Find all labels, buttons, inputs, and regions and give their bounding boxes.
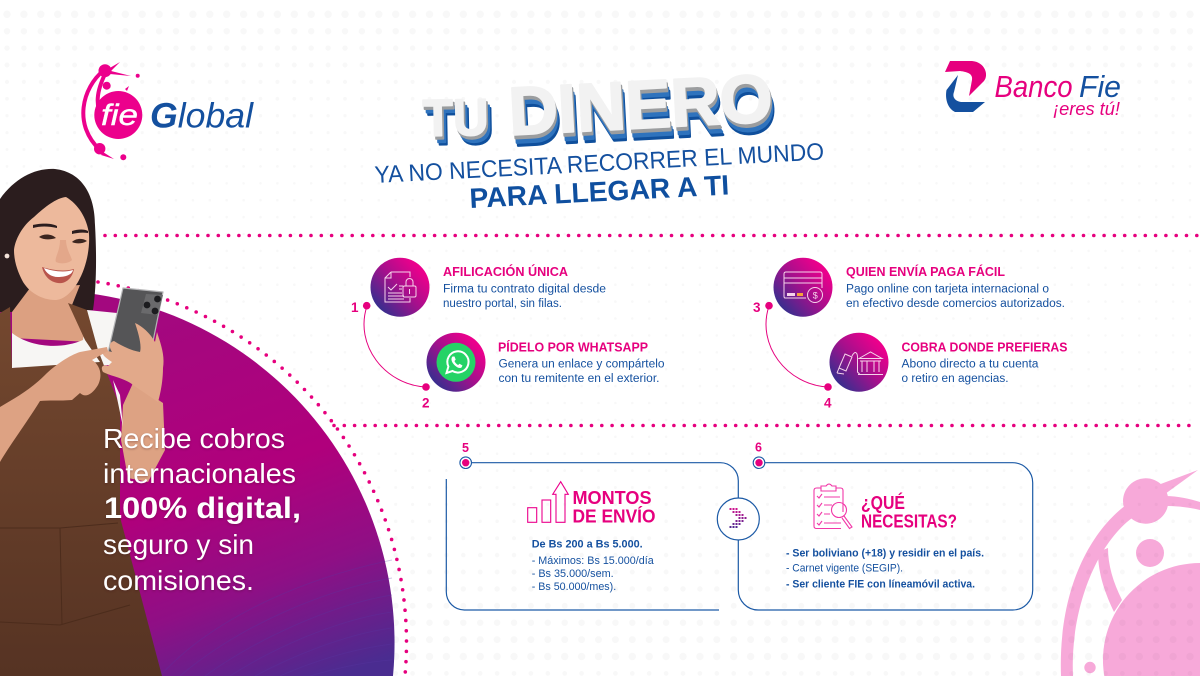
subtitle line 2: PARA LLEGAR A TI: [469, 169, 730, 214]
title: TU DINERO: TU: [426, 95, 493, 154]
text: whatsapp: con tu remitente en el exterior.: [498, 373, 660, 385]
connector 3 to 4: 4: [824, 396, 832, 410]
logo: Banco Fie: Banco: [994, 69, 1072, 104]
text: afiliacion unica: Firma tu contrato digital desde: [443, 284, 606, 296]
heading: montos: MONTOS: [572, 488, 652, 508]
magenta circle panel: [0, 290, 395, 676]
text: quien envia: en efectivo desde comercios autorizados.: [846, 298, 1065, 310]
text: whatsapp: [498, 340, 664, 385]
heading: que necesitas: ¿QUÉ: [861, 492, 905, 513]
logo: Banco Fie: ¡eres tú!: [1053, 99, 1120, 119]
text: afiliacion unica: [443, 264, 606, 310]
icon: clipboard: [814, 484, 852, 528]
icon: contract and lock: [370, 258, 430, 317]
limits text: - Máximos: Bs 15.000/día: [532, 555, 655, 567]
panel: que necesitas: [738, 440, 1033, 610]
title: TU DINERO: DINERO: [508, 64, 776, 153]
subtitle line 1: YA NO NECESITA RECORRER EL MUNDO: [374, 138, 825, 189]
panel text: recibe cobros: comisiones.: [103, 565, 254, 596]
heading: montos: DE ENVÍO: [572, 506, 656, 527]
icon: whatsapp: [426, 333, 486, 392]
logo: Fie Global: [83, 62, 254, 160]
limits text: De Bs 200 a Bs 5.000.: [532, 538, 643, 550]
logo: Banco Fie: Fie: [1079, 69, 1121, 104]
logo: Banco Fie: [945, 61, 1121, 119]
heading: que necesitas: [861, 492, 957, 531]
text: whatsapp: PÍDELO POR WHATSAPP: [498, 340, 648, 354]
limits text: - Bs 35.000/sem.: [532, 568, 614, 580]
title: TU DINERO: DINERO: [507, 60, 774, 150]
panel text: recibe cobros: [103, 423, 301, 596]
limits text: [532, 538, 655, 593]
title: TU DINERO: DINERO: [510, 71, 778, 161]
title: TU DINERO: [422, 60, 778, 161]
icon: rising bars: [528, 482, 568, 522]
arrow badge: [717, 498, 759, 540]
title: TU DINERO: TU: [422, 89, 489, 148]
connector 1 to 2: 2: [422, 396, 430, 410]
text: cobra donde: o retiro en agencias.: [902, 373, 1008, 385]
text: quien envia: QUIEN ENVÍA PAGA FÁCIL: [846, 264, 1005, 279]
title: TU DINERO: TU: [424, 92, 491, 151]
logo: Fie Global: Global: [150, 96, 254, 136]
connector 1 to 2: 1: [351, 300, 359, 315]
logo: Fie Global: fie: [101, 99, 138, 132]
limits text: - Bs 50.000/mes).: [532, 581, 616, 593]
panel text: recibe cobros: internacionales: [103, 458, 296, 489]
text: afiliacion unica: nuestro portal, sin filas.: [443, 298, 562, 310]
requirements text: - Ser boliviano (+18) y residir en el país.: [786, 548, 984, 560]
title: TU DINERO: TU: [427, 98, 494, 157]
panel: que necesitas: 6: [755, 440, 762, 454]
text: cobra donde: Abono directo a tu cuenta: [902, 358, 1039, 370]
requirements text: - Carnet vigente (SEGIP).: [786, 563, 903, 575]
text: afiliacion unica: AFILICACIÓN ÚNICA: [443, 264, 569, 279]
text: cobra donde: [902, 340, 1068, 385]
icon: card: $: [813, 290, 818, 300]
text: cobra donde: COBRA DONDE PREFIERAS: [902, 340, 1068, 354]
woman with phone: [0, 169, 165, 676]
panel: montos de envio: [446, 441, 738, 610]
connector 3 to 4: 3: [753, 300, 761, 315]
title: TU DINERO: DINERO: [509, 68, 777, 158]
connector 3 to 4: [753, 300, 832, 410]
icon: bank and phone: [830, 333, 888, 392]
panel text: recibe cobros: 100% digital,: [104, 492, 301, 525]
logo decoration: pink globe bottom right: [1061, 470, 1200, 676]
requirements text: - Ser cliente FIE con líneamóvil activa.: [786, 579, 975, 591]
text: quien envia: [846, 264, 1065, 310]
requirements text: [786, 548, 984, 591]
dotted arc: [98, 282, 406, 672]
connector 1 to 2: [351, 300, 430, 410]
text: quien envia: Pago online con tarjeta internacional o: [846, 284, 1049, 296]
panel: montos de envio: 5: [462, 441, 469, 455]
text: whatsapp: Genera un enlace y compártelo: [498, 358, 664, 370]
panel text: recibe cobros: seguro y sin: [103, 529, 254, 560]
icon: card: [774, 258, 832, 317]
heading: que necesitas: NECESITAS?: [861, 511, 957, 531]
heading: montos: [572, 488, 656, 527]
panel text: recibe cobros: Recibe cobros: [103, 423, 285, 454]
